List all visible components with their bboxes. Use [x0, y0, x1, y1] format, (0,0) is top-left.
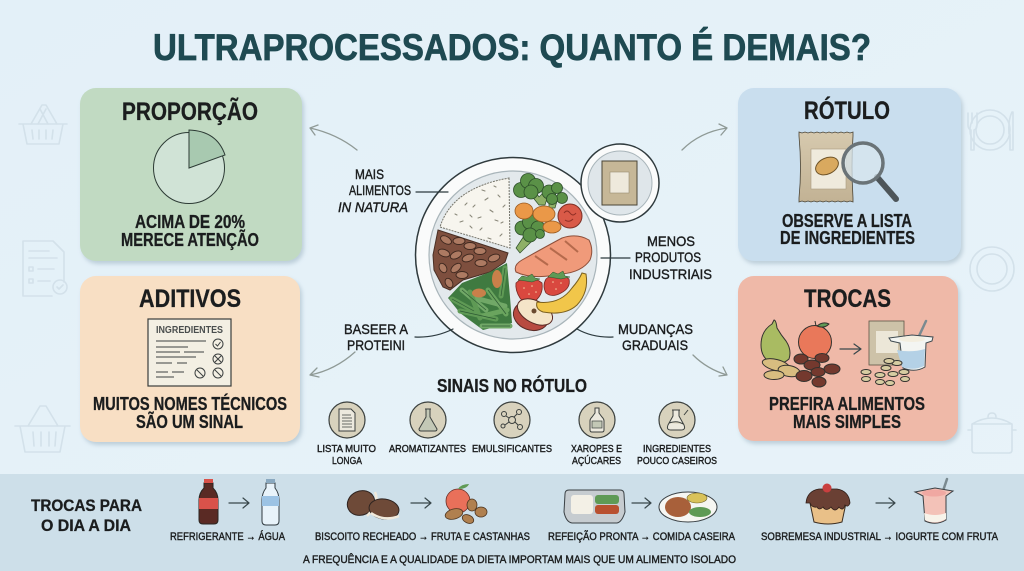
captions: swaps: BISCOITO RECHEADO → FRUTA E CASTANHAS	[315, 531, 530, 543]
text: acima de 20%: MERECE ATENÇÃO	[121, 229, 259, 250]
icon: background plate	[970, 247, 1014, 291]
icon: background cooking pot	[968, 413, 1016, 453]
heading: trocas: TROCAS	[804, 285, 891, 313]
panel: trocas	[738, 276, 958, 441]
icon: background basket lower left	[15, 406, 70, 452]
arrow: to trocas	[693, 355, 727, 376]
heading: aditivos: ADITIVOS	[139, 285, 241, 313]
label: mudanças graduais: MUDANÇAS	[618, 321, 693, 337]
signal: aromatizantes: AROMATIZANTES	[389, 443, 466, 455]
icon: apple and nuts	[444, 484, 487, 525]
chart: pie 20 percent	[154, 130, 225, 204]
text: acima de 20%: ACIMA DE 20%	[135, 212, 245, 232]
icon: processed foods	[861, 321, 933, 386]
food: carrots	[515, 203, 561, 233]
text: prefira alimentos: PREFIRA ALIMENTOS	[769, 394, 925, 414]
signal: lista muito longa	[317, 402, 376, 467]
panel: trocas para o dia a dia	[0, 474, 1024, 571]
leader line: mais alimentos	[416, 191, 448, 193]
icon: background plate and cutlery	[968, 110, 1013, 150]
text: muitos nomes técnicos: MUITOS NOMES TÉCNICOS	[93, 393, 287, 414]
signal: xaropes e açúcares: XAROPES E	[571, 443, 622, 455]
arrow: cookies to fruit	[411, 498, 431, 508]
food: roasted pieces	[472, 270, 502, 298]
text: observe a lista: OBSERVE A LISTA	[782, 211, 912, 231]
label: menos produtos industriais: INDUSTRIAIS	[629, 266, 712, 282]
signal: ingredientes pouco caseiros: POUCO CASEIROS	[637, 455, 717, 467]
label: baseer a proteini: BASEER A	[344, 321, 409, 337]
arrow: to rótulo	[682, 124, 727, 150]
arrow: to proporção	[310, 125, 357, 150]
footer note: A FREQUÊNCIA E A QUALIDADE DA DIETA IMPORTAM MAIS QUE UM ALIMENTO ISOLADO	[303, 553, 736, 566]
panel: aditivos	[80, 276, 300, 442]
captions: swaps	[170, 530, 999, 543]
food: apple slice	[509, 293, 557, 335]
icon: sandwich cookies	[343, 486, 400, 521]
heading: rótulo: RÓTULO	[804, 95, 890, 125]
food: green beans	[448, 263, 512, 330]
heading: sinais no rótulo: SINAIS NO RÓTULO	[437, 375, 587, 396]
food: banana	[537, 273, 587, 313]
icon: yogurt with spoon	[915, 479, 953, 523]
arrow: dessert to yogurt	[876, 498, 895, 508]
icon: ready meal tray	[564, 490, 625, 523]
text: observe a lista: DE INGREDIENTES	[780, 228, 915, 248]
leader line: menos produtos	[601, 257, 630, 259]
signal: ingredientes pouco caseiros: INGREDIENTES	[643, 443, 711, 455]
label: menos produtos industriais: PRODUTOS	[635, 249, 701, 265]
signal: lista muito longa: LISTA MUITO	[317, 443, 376, 455]
icon: ingredients label	[148, 319, 231, 386]
signal: ingredientes pouco caseiros	[637, 402, 717, 467]
icon: packaged product inset	[581, 144, 659, 222]
icon: homemade plate	[659, 492, 717, 522]
icon: whole foods	[761, 320, 840, 387]
heading: proporção: PROPORÇÃO	[122, 96, 258, 126]
food: beans	[433, 230, 508, 290]
leader line: mudanças graduais	[577, 329, 613, 337]
arrow: soda to water	[229, 498, 249, 508]
icon: package with magnifier	[799, 132, 896, 202]
icon: ingredients label: INGREDIENTES	[156, 324, 223, 336]
text: prefira alimentos: MAIS SIMPLES	[793, 412, 901, 432]
panel: rótulo	[738, 88, 961, 261]
food: salmon	[515, 236, 592, 277]
text: muitos nomes técnicos: SÃO UM SINAL	[136, 411, 243, 432]
heading: trocas para o dia a dia: TROCAS PARA	[31, 496, 142, 515]
arrow: tray to homemade	[632, 498, 651, 508]
heading: trocas para o dia a dia: O DIA A DIA	[41, 516, 131, 535]
arrow: swap	[840, 344, 861, 354]
signal: emulsificantes	[472, 402, 552, 455]
food: broccoli	[514, 174, 568, 253]
captions: swaps: REFRIGERANTE → ÁGUA	[170, 530, 286, 543]
label: mudanças graduais: GRADUAIS	[622, 337, 688, 353]
signal: aromatizantes	[389, 402, 466, 455]
signal: xaropes e açúcares: AÇÚCARES	[572, 454, 621, 467]
arrow: to aditivos	[310, 352, 355, 377]
food: tomato	[558, 204, 582, 228]
label: mais alimentos in natura: MAIS	[355, 166, 384, 182]
icon: background checklist	[23, 241, 67, 296]
icon: cupcake	[806, 484, 850, 524]
label: mais alimentos in natura: IN NATURA	[338, 199, 408, 215]
food: rice	[440, 178, 510, 248]
signal: xaropes e açúcares	[571, 402, 622, 467]
food: strawberries	[516, 271, 570, 304]
leader line: baseer a proteini	[415, 329, 453, 337]
illustration: plate	[416, 144, 659, 352]
icon: water bottle	[262, 479, 279, 525]
signal: lista muito longa: LONGA	[332, 455, 362, 467]
icon: soda bottle	[199, 479, 218, 524]
captions: swaps: REFEIÇÃO PRONTA → COMIDA CASEIRA	[548, 530, 736, 543]
panel: proporção	[80, 88, 302, 261]
label: mais alimentos in natura: ALIMENTOS	[349, 182, 411, 198]
title: ULTRAPROCESSADOS: QUANTO É DEMAIS?	[153, 27, 871, 68]
label: menos produtos industriais: MENOS	[647, 233, 695, 249]
label: baseer a proteini: PROTEINI	[347, 337, 405, 353]
section: sinais no rótulo	[317, 375, 717, 467]
icon: background basket top left	[19, 105, 67, 144]
signal: emulsificantes: EMULSIFICANTES	[472, 443, 552, 455]
